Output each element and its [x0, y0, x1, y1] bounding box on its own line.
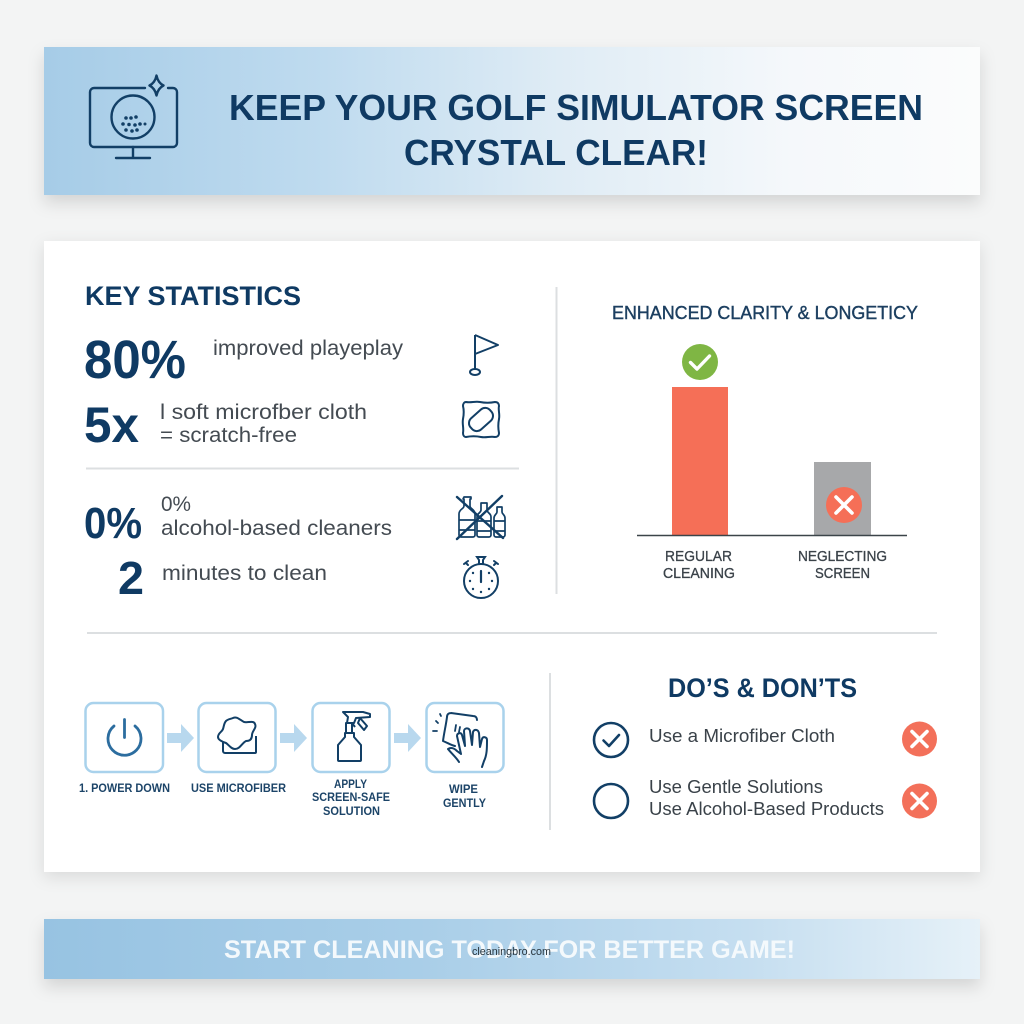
- chart heading: ENHANCED CLARITY & LONGETICY: [612, 302, 918, 323]
- stat: 2 minutes to clean: minutes to clean: [162, 561, 327, 585]
- stat: 0% alcohol-based cleaners: 0%: [84, 499, 142, 548]
- step 3: apply screen-safe solution: SOLUTION: [323, 804, 380, 818]
- text: solutions and products: Use Alcohol-Based Products: [649, 798, 884, 819]
- step 4: wipe gently: WIPE: [449, 782, 478, 796]
- stat: 0% alcohol-based cleaners: 0%: [161, 493, 191, 516]
- header banner: [44, 47, 980, 195]
- step 3: apply screen-safe solution: [312, 703, 390, 818]
- panel: key statistics: [84, 281, 519, 604]
- heading: do's and don'ts: DO’S & DON’TS: [668, 673, 857, 703]
- stat: 2 minutes to clean: 2: [118, 552, 144, 604]
- label: regular cleaning: [663, 549, 735, 582]
- label: neglecting screen: [798, 549, 887, 582]
- stat: 5x microfiber cloth: 5x: [84, 397, 139, 453]
- stat: 2 minutes to clean: [118, 552, 327, 604]
- stat: 0% alcohol-based cleaners: [84, 493, 392, 548]
- panel: do's and don'ts: [594, 673, 937, 819]
- step 4: wipe gently: GENTLY: [443, 796, 486, 810]
- stat: 80% improved playeplay: 80%: [84, 330, 186, 390]
- watermark: cleaningbro.com: [472, 946, 551, 958]
- icon: red cross 2: [902, 784, 937, 818]
- footer banner: [44, 919, 980, 979]
- stat: 80% improved playeplay: improved playeplay: [213, 336, 403, 360]
- text: solutions and products: Use Gentle Solutions: [649, 776, 823, 797]
- label: neglecting screen: NEGLECTING: [798, 549, 887, 565]
- text: solutions and products: [649, 776, 884, 819]
- title: CRYSTAL CLEAR!: [404, 132, 708, 173]
- step 3: apply screen-safe solution: SCREEN-SAFE: [312, 790, 390, 804]
- label: neglecting screen: SCREEN: [815, 566, 870, 582]
- arrow 1: [167, 724, 194, 752]
- step 1: power down: 1. POWER DOWN: [79, 781, 170, 795]
- icon: red cross 1: [902, 722, 937, 756]
- stat: 5x microfiber cloth: [84, 397, 367, 453]
- bar: regular cleaning: [672, 387, 728, 535]
- label: regular cleaning: REGULAR: [665, 549, 732, 565]
- icon: golf ball on monitor: [90, 76, 177, 158]
- bar: neglecting screen: [814, 462, 871, 535]
- stat: 5x microfiber cloth: l soft microfber cloth: [160, 400, 367, 424]
- step 3: apply screen-safe solution: APPLY: [334, 777, 367, 791]
- icon: check circle: [594, 723, 628, 757]
- process steps: [79, 703, 504, 818]
- stat: 0% alcohol-based cleaners: alcohol-based cleaners: [161, 516, 392, 540]
- arrow 2: [280, 724, 307, 752]
- call to action: START CLEANING TODAY FOR BETTER GAME!: [224, 936, 795, 964]
- icon: crossed out bottles: [457, 496, 505, 539]
- title: [229, 87, 923, 173]
- step 4: wipe gently: [426, 703, 504, 810]
- main panel: [44, 241, 980, 872]
- icon: green check: [682, 344, 718, 380]
- title: KEEP YOUR GOLF SIMULATOR SCREEN: [229, 87, 923, 128]
- icon: golf flag: [470, 335, 498, 375]
- icon: microfiber cloth: [463, 402, 499, 437]
- heading: key statistics: KEY STATISTICS: [85, 281, 301, 311]
- arrow 3: [394, 724, 421, 752]
- step 2: use microfiber: USE MICROFIBER: [191, 781, 286, 795]
- icon: stopwatch: [464, 557, 498, 598]
- stat: 5x microfiber cloth: = scratch-free: [160, 423, 297, 447]
- icon: red cross: [826, 487, 862, 523]
- label: regular cleaning: CLEANING: [663, 566, 735, 582]
- icon: empty circle: [594, 784, 628, 818]
- stat: 80% improved playeplay: [84, 330, 403, 390]
- step 2: use microfiber: [191, 703, 286, 795]
- bar chart: enhanced clarity and longevity: [612, 302, 918, 582]
- step 1: power down: [79, 703, 170, 795]
- text: use a microfiber cloth: Use a Microfiber Cloth: [649, 725, 835, 746]
